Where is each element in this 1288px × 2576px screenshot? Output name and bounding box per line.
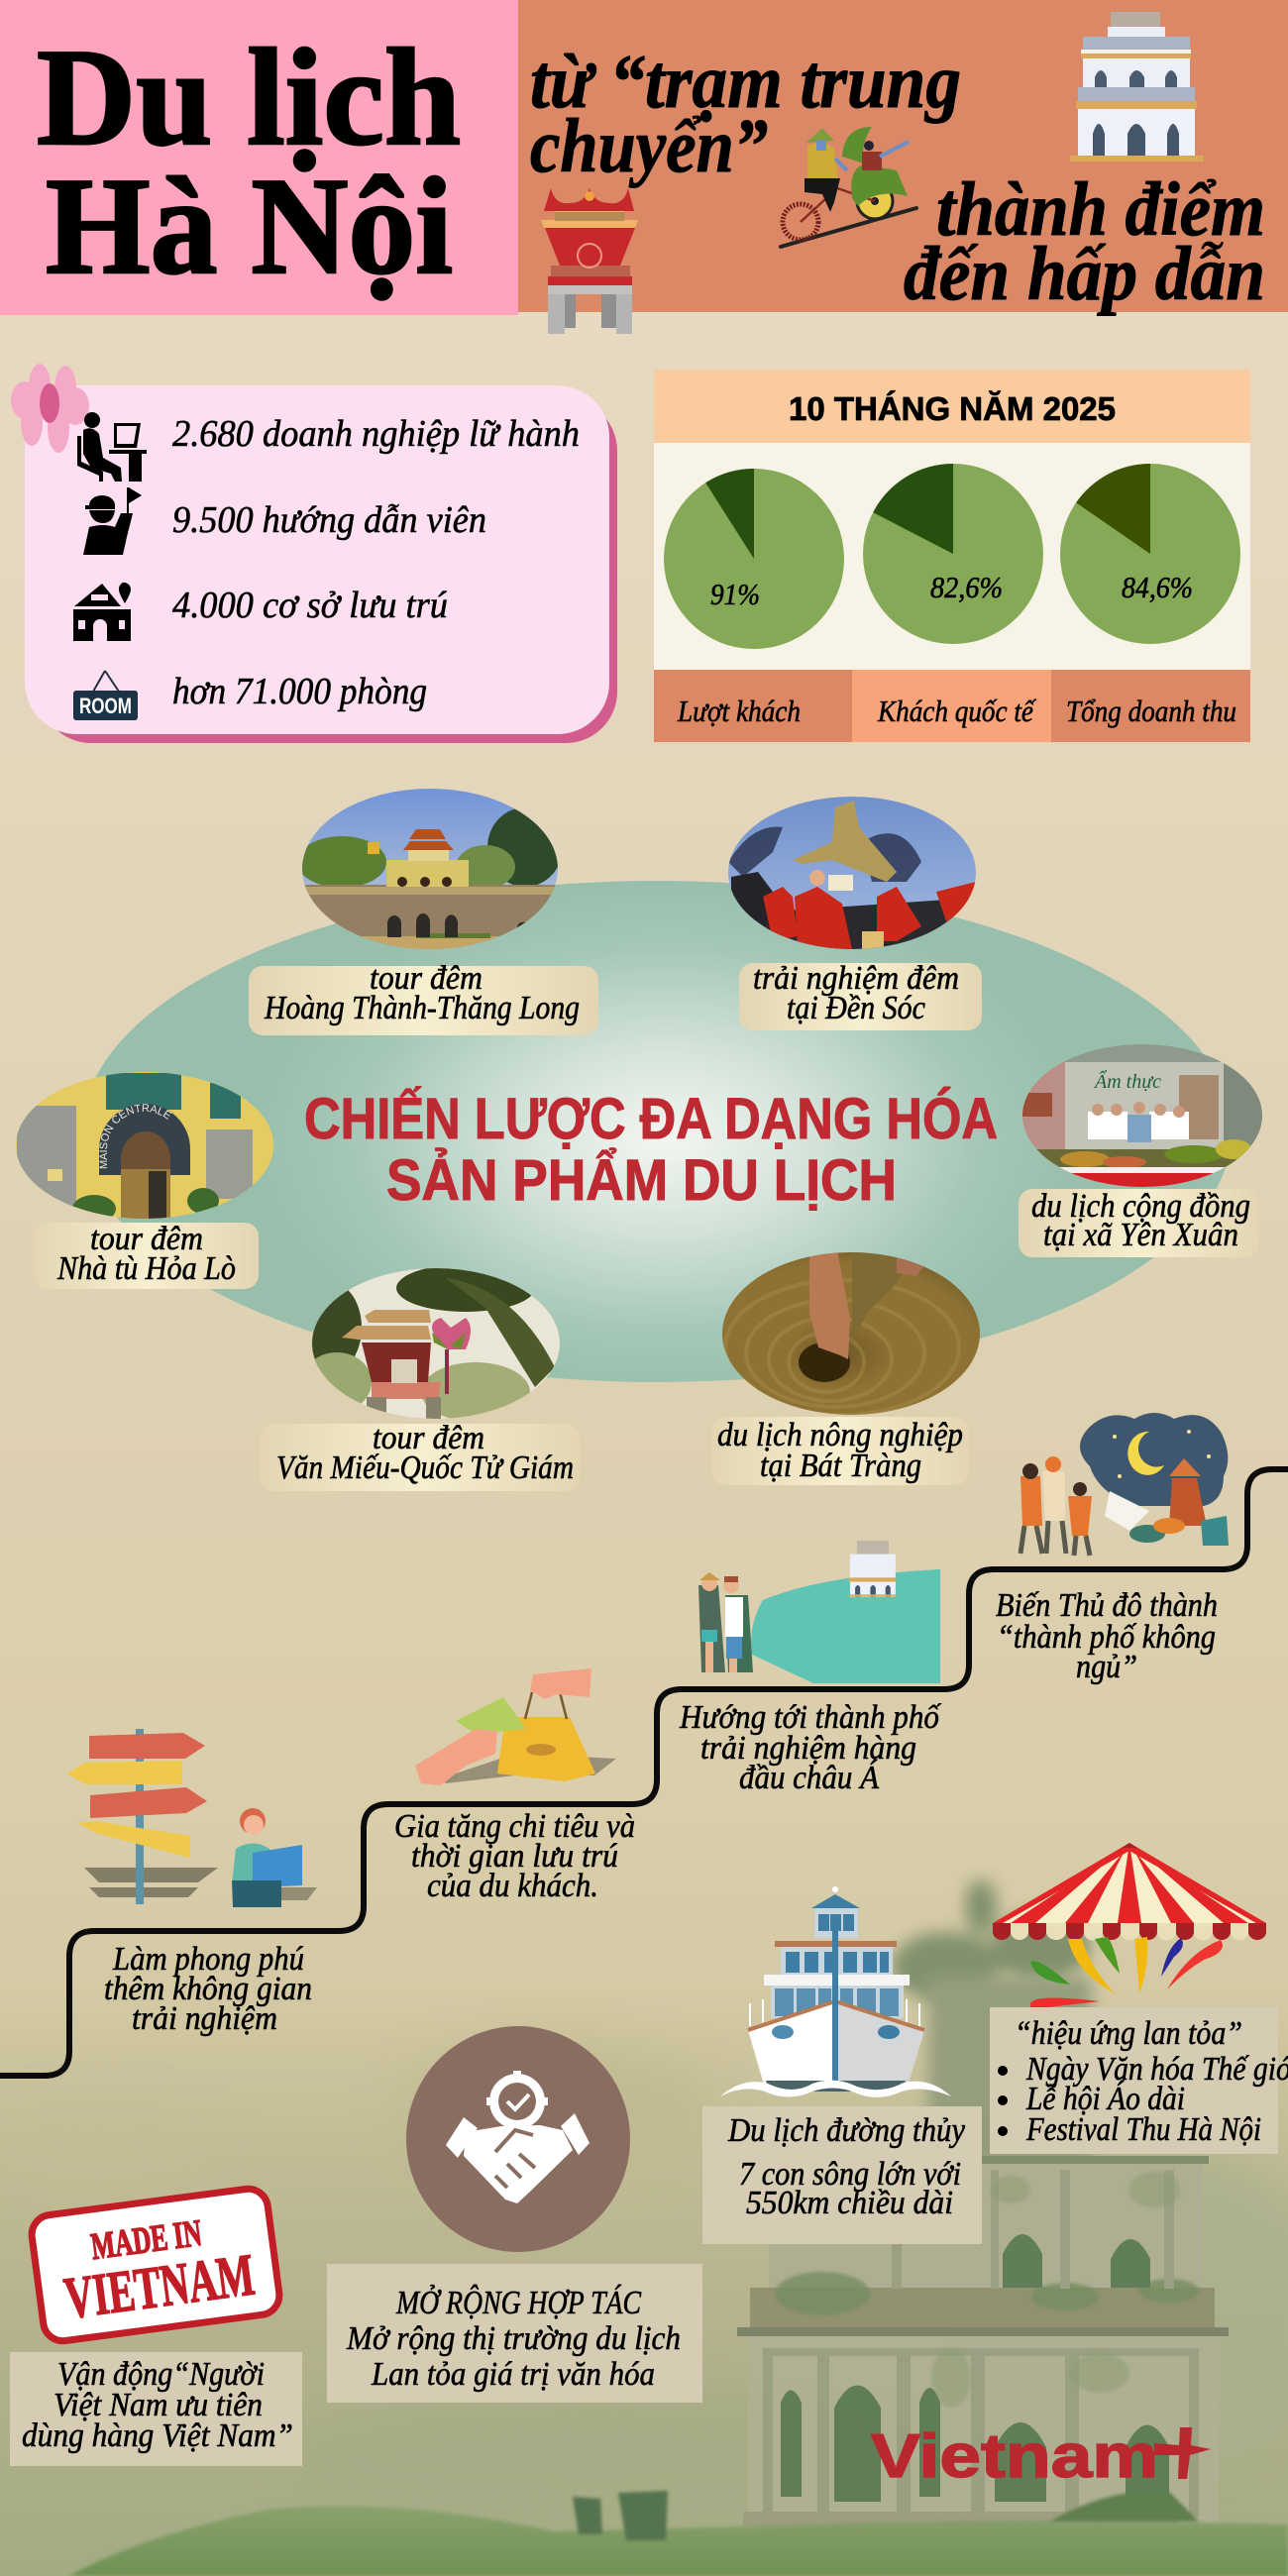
label: khách quốc tế: Khách quốc tế — [877, 694, 1037, 728]
icon: Made in Vietnam stamp: VIETNAM — [60, 2241, 258, 2331]
pie chart: khách quốc tế: 82,6% — [930, 570, 1003, 604]
pie chart: tổng doanh thu — [1060, 464, 1240, 644]
photo: Yen Xuan community food: Ẩm thực — [1093, 1069, 1161, 1093]
panel: Vietnamese goods campaign — [10, 2352, 302, 2466]
label: Den Soc: trải nghiệm đêm — [753, 960, 959, 997]
photo: Yen Xuan community food — [1022, 1044, 1262, 1187]
photo: Den Soc festival — [728, 797, 976, 949]
photo: Van Mieu — [312, 1268, 560, 1419]
stat: cơ sở lưu trú: 4.000 cơ sở lưu trú — [172, 585, 448, 626]
panel: tourism capacity stats — [11, 364, 617, 743]
icon: night street with tourists and vendor — [1020, 1413, 1229, 1556]
photo: Hoa Lo prison — [16, 1072, 273, 1219]
icon: signpost and woman with map — [67, 1729, 317, 1907]
panel: mở rộng hợp tác — [327, 2264, 702, 2403]
text: stair step 2: Gia tăng chi tiêu và — [394, 1808, 635, 1845]
text: stair step 2: thời gian lưu trú — [411, 1838, 618, 1875]
label: Den Soc: tại Đền Sóc — [787, 990, 925, 1026]
icon: Khue Van Cac gate — [541, 188, 638, 334]
text: stair step 3: đầu châu Á — [739, 1760, 879, 1796]
pie chart: lượt khách — [664, 469, 844, 649]
icon: room sign — [73, 671, 138, 720]
label: Van Mieu: Văn Miếu-Quốc Tử Giám — [276, 1449, 574, 1486]
photo: Hoa Lo prison: MAISON CENTRALE — [99, 1104, 172, 1169]
photo: Bat Trang pottery — [718, 1248, 986, 1419]
stat: phòng: hơn 71.000 phòng — [172, 671, 427, 712]
panel: Vietnamese goods campaign: Vận động“Người — [57, 2356, 265, 2393]
label: Hoa Lo: Nhà tù Hỏa Lò — [56, 1250, 236, 1287]
label: Yen Xuan — [1019, 1188, 1259, 1257]
icon: flower — [11, 364, 89, 453]
panel: du lịch đường thủy — [702, 2106, 982, 2244]
icon: festival tent — [993, 1843, 1266, 2009]
label: Bat Trang: tại Bát Tràng — [760, 1448, 921, 1484]
stat: doanh nghiệp: 2.680 doanh nghiệp lữ hành — [172, 413, 580, 455]
text: stair step 2: của du khách. — [427, 1868, 598, 1904]
background photo: Turtle Tower — [737, 1879, 1229, 2526]
label: tour Hoang Thanh: tour đêm — [370, 960, 483, 997]
panel: mở rộng hợp tác: Lan tỏa giá trị văn hóa — [371, 2356, 655, 2393]
label: Yen Xuan: du lịch cộng đồng — [1031, 1188, 1250, 1225]
label: Hoa Lo: tour đêm — [90, 1221, 203, 1257]
label: Den Soc — [739, 960, 982, 1030]
pie chart: khách quốc tế — [863, 464, 1043, 644]
icon: office worker — [77, 412, 147, 482]
heading: 10 tháng năm 2025: 10 THÁNG NĂM 2025 — [789, 390, 1116, 427]
panel: Vietnamese goods campaign: Việt Nam ưu tiên — [54, 2387, 263, 2423]
title: Du lịch Hà Nội — [37, 21, 461, 303]
icon: room sign: ROOM — [79, 694, 132, 718]
pie chart: lượt khách: 91% — [710, 577, 760, 611]
subtitle — [530, 39, 1265, 316]
pie chart: tổng doanh thu: 84,6% — [1122, 570, 1193, 604]
icon: Made in Vietnam stamp — [30, 2187, 281, 2343]
arrow: rising stairs path — [0, 1469, 1288, 2076]
logo: Vietnam+: Vietnam — [871, 2422, 1158, 2491]
panel: hiệu ứng lan tỏa: “hiệu ứng lan tỏa” — [1015, 2015, 1242, 2052]
icon: Made in Vietnam stamp: MADE IN — [88, 2212, 204, 2268]
subtitle: thành điểm — [936, 166, 1265, 252]
text: stair step 4: “thành phố không — [997, 1619, 1216, 1656]
panel: 10 months results — [654, 370, 1250, 742]
label: Yen Xuan: tại xã Yên Xuân — [1043, 1217, 1238, 1253]
icon: handshake circle — [406, 2026, 630, 2252]
subtitle: đến hấp dẫn — [904, 231, 1265, 316]
label: lượt khách: Lượt khách — [677, 694, 801, 728]
label: Bat Trang: du lịch nông nghiệp — [717, 1417, 963, 1453]
icon: hand with money and shopping bag — [415, 1668, 616, 1785]
header: pink title panel — [0, 0, 518, 315]
label: tour Hoang Thanh — [249, 960, 598, 1035]
panel: mở rộng hợp tác: Mở rộng thị trường du lịch — [346, 2320, 681, 2357]
panel: du lịch đường thủy: 550km chiều dài — [746, 2185, 953, 2221]
subtitle: từ “trạm trung — [530, 39, 961, 124]
photo: Hoang Thanh Thang Long — [302, 789, 558, 949]
label: Bat Trang — [711, 1417, 969, 1485]
heading: strategy title — [304, 1087, 998, 1213]
panel: hiệu ứng lan tỏa: Lễ hội Áo dài — [1025, 2081, 1185, 2117]
subtitle: chuyển” — [530, 103, 768, 188]
text: stair step 3: Hướng tới thành phố — [679, 1699, 942, 1736]
title: Du lịch Hà Nội: Du lịch — [37, 21, 461, 174]
text: stair step 3: trải nghiệm hàng — [700, 1730, 916, 1767]
icon: cruise boat — [720, 1886, 951, 2097]
panel: diversification strategy oval — [82, 881, 1232, 1382]
text: stair step 4: Biến Thủ đô thành — [996, 1587, 1218, 1624]
panel: du lịch đường thủy: 7 con sông lớn với — [739, 2156, 961, 2193]
text: stair step 1 — [104, 1941, 312, 2037]
icon: lodging house — [73, 583, 131, 641]
heading: strategy title: SẢN PHẨM DU LỊCH — [386, 1148, 897, 1213]
panel: mở rộng hợp tác: MỞ RỘNG HỢP TÁC — [395, 2284, 641, 2321]
label: Van Mieu — [260, 1420, 580, 1491]
title: Du lịch Hà Nội: Hà Nội — [46, 150, 453, 303]
text: stair step 1: thêm không gian — [104, 1971, 312, 2007]
icon: tourists by Hoan Kiem lake — [698, 1541, 940, 1683]
header: orange subtitle panel — [518, 0, 1288, 316]
panel: du lịch đường thủy: Du lịch đường thủy — [727, 2112, 966, 2149]
text: stair step 1: Làm phong phú — [112, 1941, 304, 1978]
stat: hướng dẫn viên: 9.500 hướng dẫn viên — [172, 499, 486, 541]
text: stair step 3 — [679, 1699, 942, 1796]
label: tour Hoang Thanh: Hoàng Thành-Thăng Long — [264, 990, 580, 1026]
label: Hoa Lo — [33, 1221, 259, 1289]
logo: Vietnam+ — [871, 2422, 1211, 2491]
text: stair step 1: trải nghiệm — [132, 2000, 277, 2037]
icon: cyclo — [781, 127, 916, 247]
text: stair step 4: ngủ” — [1076, 1649, 1137, 1685]
icon: Turtle Tower illustration — [1070, 12, 1204, 161]
heading: strategy title: CHIẾN LƯỢC ĐA DẠNG HÓA — [304, 1087, 998, 1151]
label: tổng doanh thu: Tổng doanh thu — [1066, 694, 1236, 728]
grass foreground — [69, 2491, 1288, 2576]
panel: Vietnamese goods campaign: dùng hàng Việt Nam” — [22, 2417, 293, 2454]
text: stair step 2 — [394, 1808, 635, 1904]
text: stair step 4 — [996, 1587, 1218, 1685]
icon: tour guide — [83, 487, 142, 555]
label: Van Mieu: tour đêm — [373, 1420, 484, 1456]
panel: hiệu ứng lan tỏa — [990, 2007, 1288, 2154]
